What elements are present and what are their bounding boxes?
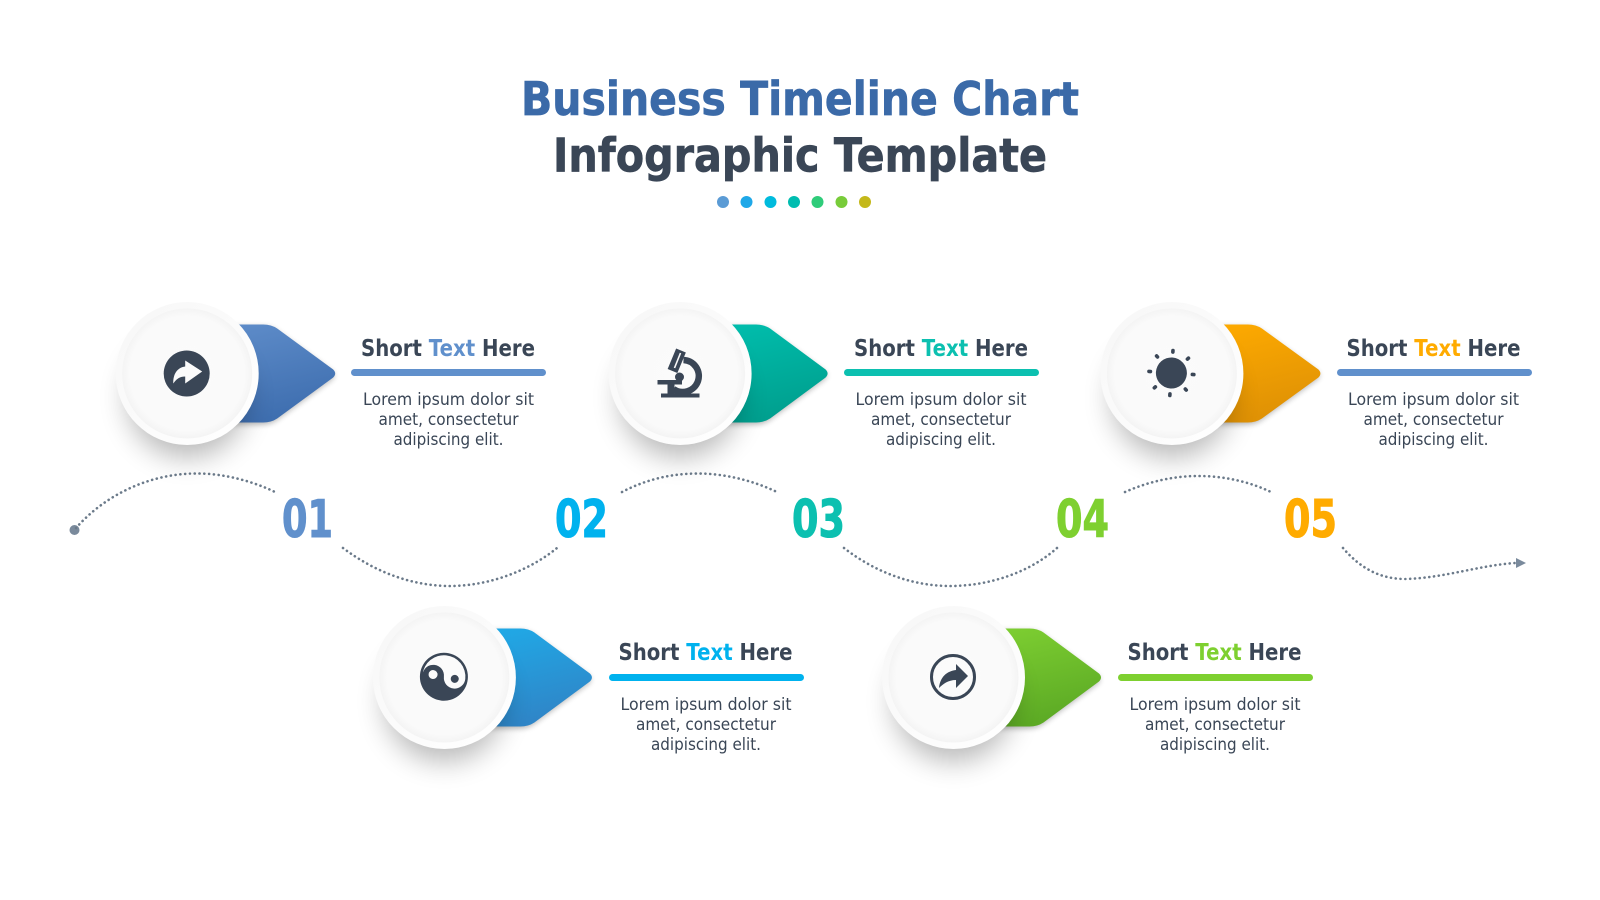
body 5: Lorem ipsum dolor sit [1130, 695, 1301, 715]
numbers: 05 [1284, 490, 1337, 550]
icon: sun [1147, 349, 1195, 397]
numbers: 02 [555, 490, 608, 550]
numbers: 03 [792, 490, 845, 550]
panel: step 1 [116, 302, 546, 458]
rule 1 [351, 369, 546, 376]
body 3: Lorem ipsum dolor sit [1348, 390, 1519, 410]
body 1: adipiscing elit. [394, 430, 504, 450]
title: Business Timeline Chart [521, 72, 1079, 126]
body 5: amet, consectetur [1145, 715, 1285, 735]
heading 2: Short Text Here [854, 336, 1028, 362]
rule 3 [1337, 369, 1532, 376]
rule 4 [609, 674, 804, 681]
pointer 4 [473, 628, 592, 728]
numbers: 01 [282, 490, 333, 550]
panel: step 5 [882, 606, 1313, 762]
icon: yin yang [418, 650, 470, 703]
heading 5: Short Text Here [1128, 640, 1302, 666]
body 1 [363, 390, 534, 450]
body 3: amet, consectetur [1364, 410, 1504, 430]
icon: share in ring [932, 656, 974, 698]
disc 3 [1100, 302, 1243, 458]
body 1: Lorem ipsum dolor sit [363, 390, 534, 410]
title: Infographic Template [553, 128, 1047, 182]
numbers: 04 [1056, 490, 1109, 550]
body 2: adipiscing elit. [886, 430, 996, 450]
icon: microscope [658, 350, 700, 398]
body 5 [1130, 695, 1301, 755]
heading 3: Short Text Here [1346, 336, 1520, 362]
rule 5 [1118, 674, 1313, 681]
title dots [717, 196, 871, 208]
disc 1 [116, 302, 259, 458]
pointer 5 [982, 628, 1101, 728]
heading 4: Short Text Here [618, 640, 792, 666]
panel: step 4 [373, 606, 804, 762]
dotted timeline path [70, 473, 1526, 586]
body 2: Lorem ipsum dolor sit [856, 390, 1027, 410]
arrowhead [1516, 558, 1526, 568]
panel: step 3 [1100, 302, 1532, 458]
body 4: adipiscing elit. [651, 735, 761, 755]
pointer 1 [216, 324, 335, 424]
heading 1: Short Text Here [361, 336, 535, 362]
disc 5 [882, 606, 1025, 762]
panel: step 2 [609, 302, 1039, 458]
body 3: adipiscing elit. [1378, 430, 1488, 450]
body 3 [1348, 390, 1519, 450]
pointer 2 [709, 324, 828, 424]
body 2: amet, consectetur [871, 410, 1011, 430]
numbers [282, 490, 1337, 550]
body 4 [620, 695, 792, 755]
body 4: amet, consectetur [636, 715, 776, 735]
body 1: amet, consectetur [378, 410, 519, 430]
rule 2 [844, 369, 1039, 376]
body 4: Lorem ipsum dolor sit [620, 695, 792, 715]
icon: share in solid circle [164, 350, 210, 396]
body 2 [856, 390, 1027, 450]
body 5: adipiscing elit. [1160, 735, 1270, 755]
title [521, 72, 1079, 182]
disc 4 [373, 606, 516, 762]
disc 2 [609, 302, 752, 458]
pointer 3 [1201, 324, 1320, 424]
